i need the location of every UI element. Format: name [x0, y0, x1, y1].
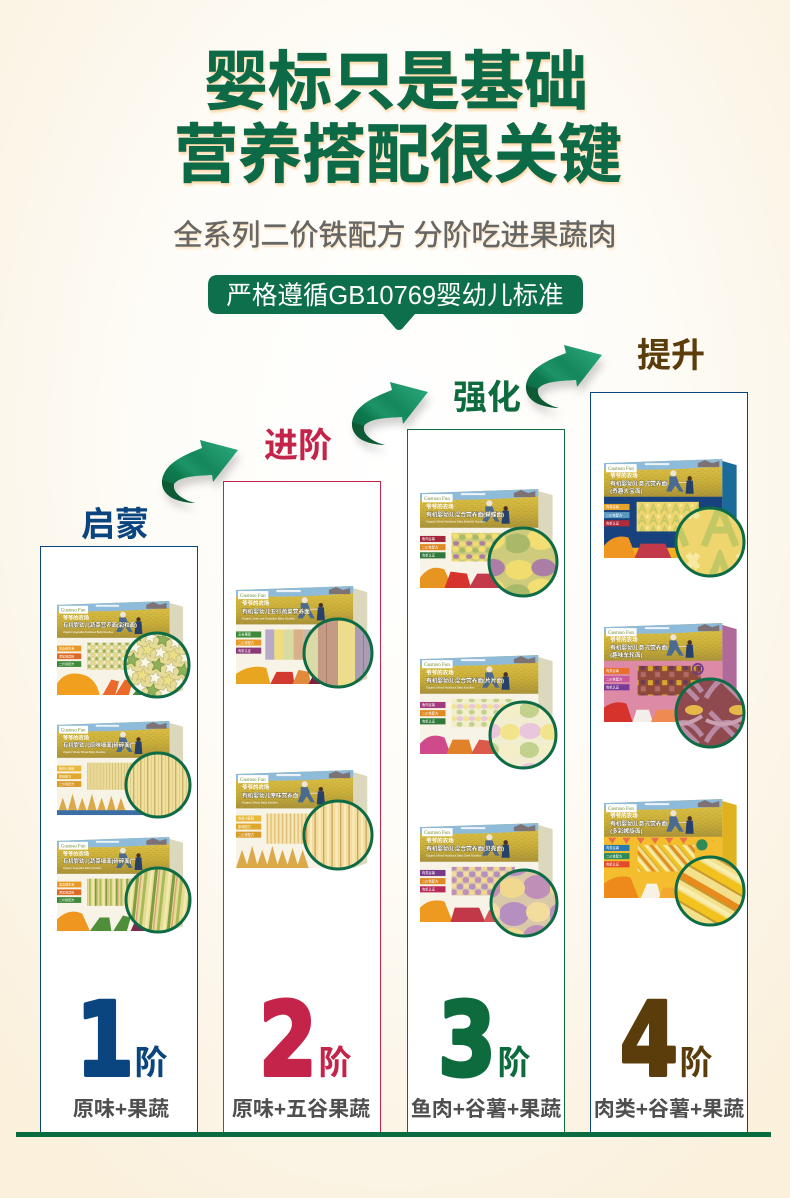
product: wheel pasta: 爷爷的农场 [610, 635, 638, 643]
product: butterfly pasta: Organic Mixed Nutritious Baby Butterfly Noodles [426, 520, 486, 524]
product: fusilli pasta: 肉类谷薯 [606, 845, 620, 850]
product: flower disc pasta: 有机婴幼儿混合营养面(片片面) [426, 677, 504, 685]
product: wheat noodles: 有机婴幼儿原味细面(碎碎面) [63, 741, 132, 749]
product: five-grain noodles: 五谷果蔬 [238, 632, 252, 637]
caption: stage 3: 鱼肉+谷薯+果蔬 [411, 1098, 561, 1121]
product: vegetable star pasta: 有机婴幼儿蔬菜营养面(彩粒面) [63, 621, 137, 629]
product: wheat noodles [236, 770, 372, 869]
product: shell pasta: 有机认证 [422, 887, 436, 892]
product: fusilli pasta: 有机认证 [606, 862, 620, 867]
product: wheel pasta: (趣味车轮面) [610, 651, 643, 659]
title: 婴标只是基础 [204, 46, 588, 118]
product: shell pasta: Organic Mixed Nutritious Baby Shell Noodles [426, 854, 482, 858]
unit: 阶: 阶 [318, 1044, 352, 1081]
product: flower disc pasta: 鱼肉谷薯 [422, 702, 436, 707]
heading: 启蒙: 启蒙 [81, 506, 149, 544]
unit: 阶: 阶 [680, 1044, 712, 1081]
product: fusilli pasta: Gustoso Fun [608, 806, 634, 812]
product: five-grain noodles: 有机婴幼儿五行蔬菜营养面 [242, 607, 310, 615]
product: five-grain noodles [236, 586, 372, 687]
product: wheel pasta: 有机认证 [606, 685, 620, 690]
panel: stage 2 [224, 482, 380, 1132]
arrow: step 3 to 4 [526, 345, 602, 408]
product: vegetable noodles: Gustoso Fun [61, 845, 86, 850]
product: flower disc pasta [420, 655, 556, 768]
product: wheat noodles: 爷爷的农场 [242, 783, 270, 791]
product: five-grain noodles: Gustoso Fun [240, 593, 266, 599]
product: wheat noodles: Gustoso Fun [240, 777, 266, 783]
product: wheat noodles: Gustoso Fun [61, 729, 86, 734]
product: vegetable noodles: 添加蔬菜粉 [59, 889, 74, 894]
product: shell pasta: 肉类谷薯 [422, 870, 436, 875]
number: stage 1: 1 [76, 980, 134, 1099]
product: wheat noodles: 有机婴幼儿原味营养面 [242, 791, 299, 799]
product: letter pasta: 二价铁配方 [606, 512, 623, 517]
product: vegetable star pasta: 富含维生素 [59, 646, 74, 651]
product: shell pasta [420, 823, 557, 936]
product: shell pasta: 二价铁配方 [422, 878, 439, 883]
product: wheat noodles: 原味配方 [59, 773, 71, 778]
product: five-grain noodles: Organic Grain and Vegetable Baby Noodles [242, 616, 295, 620]
product: butterfly pasta: 有机认证 [422, 553, 436, 558]
caption: stage 1: 原味+果蔬 [73, 1098, 169, 1121]
product: letter pasta: 肉类谷薯 [606, 504, 620, 509]
product: vegetable star pasta: 爷爷的农场 [63, 613, 89, 621]
product: vegetable star pasta: 添加蔬菜粉 [59, 653, 74, 658]
product: fusilli pasta: 爷爷的农场 [610, 811, 638, 819]
arrow: step 1 to 2 [162, 440, 238, 503]
product: butterfly pasta: 二价铁配方 [422, 544, 439, 549]
product: letter pasta: (奇趣大宝面) [610, 487, 643, 495]
heading: 强化: 强化 [453, 379, 521, 417]
product: wheat noodles: 爷爷的农场 [63, 733, 89, 741]
product: wheat noodles: 有机小麦粉 [238, 816, 255, 821]
panel: stage 4 [590, 392, 748, 1132]
product: wheat noodles [57, 721, 190, 817]
product: flower disc pasta: 有机认证 [422, 719, 436, 724]
product: wheat noodles: Organic Whole Wheat Baby Noodles [63, 750, 106, 754]
product: fusilli pasta: (多彩螺旋面) [610, 827, 643, 835]
product: shell pasta: 有机婴幼儿混合营养面(贝壳面) [426, 845, 504, 853]
product: flower disc pasta: Organic Mixed Nutritious Baby Noodles [426, 686, 475, 690]
unit: 阶: 阶 [498, 1044, 530, 1081]
product: flower disc pasta: Gustoso Fun [424, 662, 450, 668]
product: wheat noodles: 原味配方 [238, 824, 251, 829]
callout: standard pill [208, 275, 583, 330]
product: wheel pasta: 二价铁配方 [606, 676, 623, 681]
heading: 进阶: 进阶 [264, 427, 332, 465]
product: five-grain noodles: 爷爷的农场 [242, 599, 270, 607]
product: fusilli pasta: 有机婴幼儿意式营养面 [610, 820, 667, 828]
product: letter pasta: 有机认证 [606, 521, 620, 526]
product: letter pasta: 有机婴幼儿意式营养面 [610, 480, 667, 488]
product: vegetable noodles: 爷爷的农场 [63, 849, 89, 857]
title [174, 46, 622, 191]
product: vegetable star pasta: Gustoso Fun [61, 609, 86, 614]
unit: 阶: 阶 [134, 1044, 168, 1081]
product: butterfly pasta [420, 489, 557, 596]
product: flower disc pasta: 爷爷的农场 [426, 668, 454, 676]
heading: 提升: 提升 [637, 337, 705, 375]
product: vegetable noodles [57, 837, 190, 932]
product: letter pasta: 爷爷的农场 [610, 471, 638, 479]
product: wheel pasta: 有机婴幼儿意式营养面 [610, 644, 667, 652]
product: butterfly pasta: 鱼肉谷薯 [422, 536, 436, 541]
product: wheel pasta: Gustoso Fun [608, 630, 634, 636]
panel: stage 1 [40, 546, 198, 1132]
subtitle: 全系列二价铁配方 分阶吃进果蔬肉 [173, 219, 617, 252]
product: shell pasta: 爷爷的农场 [426, 836, 454, 844]
number: stage 2: 2 [259, 980, 317, 1099]
product: wheat noodles: Organic Wheat Baby Noodles [242, 800, 279, 804]
product: shell pasta: Gustoso Fun [424, 830, 450, 836]
arrow: step 2 to 3 [352, 382, 428, 445]
title: 营养搭配很关键 [174, 119, 622, 191]
product: butterfly pasta: 爷爷的农场 [426, 502, 454, 510]
product: vegetable noodles: 富含维生素 [59, 882, 74, 887]
number: stage 3: 3 [438, 980, 496, 1099]
product: vegetable noodles: 有机婴幼儿蔬菜细面(碎碎面) [63, 857, 132, 865]
caption: stage 4: 肉类+谷薯+果蔬 [594, 1098, 744, 1121]
product: vegetable star pasta: Organic Vegetable Nutritious Baby Noodles [63, 630, 114, 634]
panel: stage 3 [408, 430, 564, 1132]
product: five-grain noodles: 二价铁配方 [238, 640, 254, 645]
product: wheat noodles: 有机小麦粉 [59, 766, 74, 771]
product: vegetable noodles: 二价铁配方 [59, 897, 74, 902]
product: fusilli pasta [604, 799, 744, 925]
number: stage 4: 4 [620, 980, 678, 1099]
product: wheel pasta [604, 623, 744, 747]
product: wheel pasta: 肉类谷薯 [606, 668, 620, 673]
product: wheat noodles: 二价铁配方 [59, 781, 74, 786]
product: letter pasta: Gustoso Fun [608, 466, 634, 472]
product: letter pasta [604, 459, 744, 576]
product: butterfly pasta: 有机婴幼儿混合营养面(蝴蝶面) [426, 511, 504, 519]
product: flower disc pasta: 二价铁配方 [422, 710, 439, 715]
product: vegetable noodles: Organic Vegetable Baby Noodles [63, 866, 102, 870]
product: wheat noodles: 二价铁配方 [238, 832, 254, 837]
product: five-grain noodles: 有机认证 [238, 648, 252, 653]
caption: stage 2: 原味+五谷果蔬 [232, 1098, 370, 1121]
product: vegetable star pasta [57, 601, 189, 697]
baseline bar [16, 1132, 771, 1137]
callout: standard pill: 严格遵循GB10769婴幼儿标准 [226, 282, 564, 310]
product: fusilli pasta: 二价铁配方 [606, 853, 623, 858]
product: vegetable star pasta: 二价铁配方 [59, 661, 74, 666]
product: butterfly pasta: Gustoso Fun [424, 496, 450, 502]
